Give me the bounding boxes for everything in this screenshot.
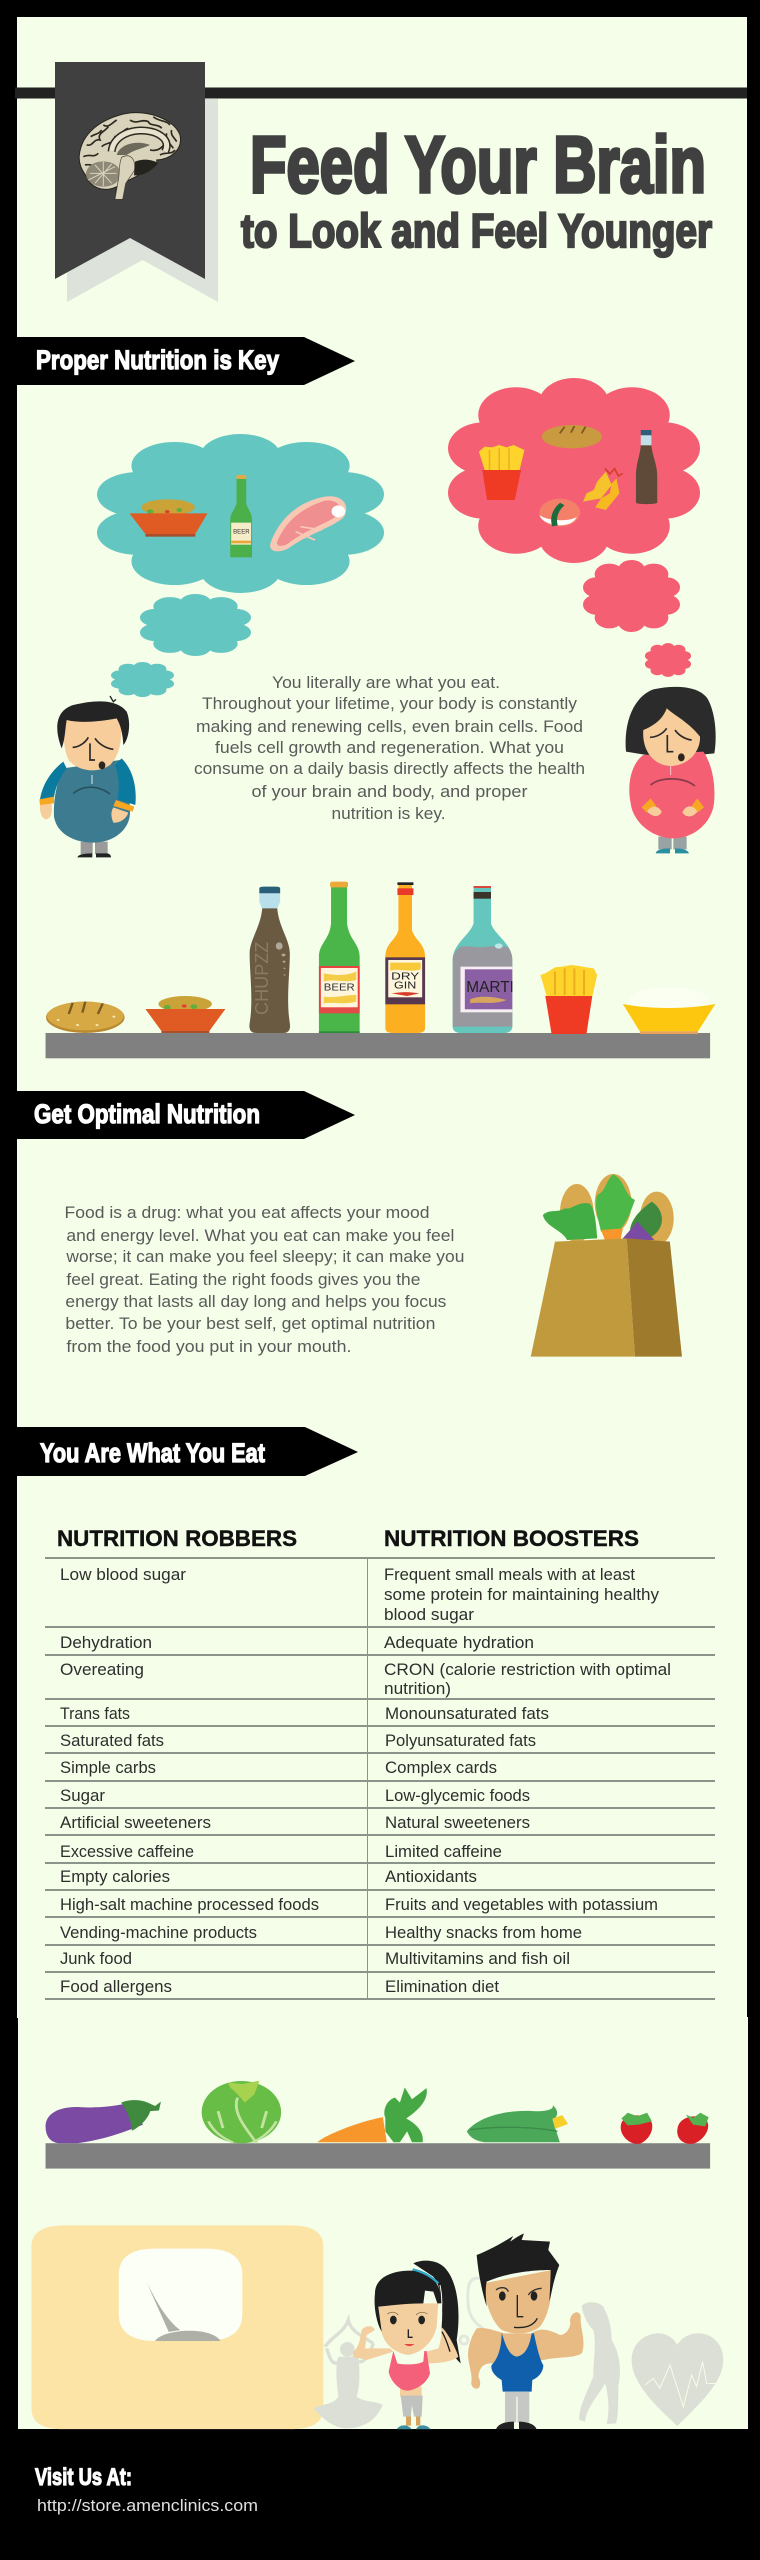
icon: gin bottle: DRY <box>391 971 420 982</box>
shelf with vegetables <box>46 2081 710 2169</box>
column: robbers: High-salt machine processed foods <box>60 1895 319 1914</box>
icon: beer bottle: BEER <box>233 527 250 535</box>
section banner: proper nutrition <box>17 337 355 385</box>
paragraph: food is a drug: feel great. Eating the right foods gives you the <box>66 1270 420 1289</box>
column: boosters: Antioxidants <box>385 1867 477 1886</box>
thought cloud: teal small <box>111 662 174 697</box>
character: fit man <box>468 2233 584 2429</box>
column: robbers: Sugar <box>60 1786 105 1805</box>
silhouette: heart with pulse <box>632 2333 732 2426</box>
title <box>241 120 712 257</box>
paragraph: food is a drug: from the food you put in your mouth. <box>66 1337 351 1356</box>
column: robbers: Empty calories <box>60 1867 170 1886</box>
icon: steak <box>270 496 346 551</box>
icon: fries <box>479 445 524 500</box>
icon: shrimp <box>583 468 623 510</box>
footer: visit us: Visit Us At: <box>35 2464 132 2491</box>
column: boosters: Frequent small meals with at least <box>384 1565 635 1584</box>
icon: salad bowl <box>145 996 225 1033</box>
column: boosters: Natural sweeteners <box>385 1813 530 1832</box>
column: robbers: Excessive caffeine <box>60 1842 194 1861</box>
column: robbers: Vending-machine products <box>60 1923 257 1942</box>
column: boosters: blood sugar <box>384 1605 474 1624</box>
column: boosters: Multivitamins and fish oil <box>385 1949 570 1968</box>
paragraph: you are what you eat: making and renewing cells, even brain cells. Food <box>196 717 583 736</box>
icon: beer bottle <box>230 475 252 557</box>
column: boosters: Monounsaturated fats <box>385 1704 549 1723</box>
section banner: optimal nutrition: Get Optimal Nutrition <box>34 1099 260 1129</box>
icon: beer bottle: BEER <box>324 982 355 993</box>
icon: carrot <box>317 2087 427 2142</box>
column: boosters: Polyunsaturated fats <box>385 1731 536 1750</box>
icon: martini bottle: MARTINI <box>466 979 529 996</box>
column: boosters: Low-glycemic foods <box>385 1786 530 1805</box>
column: robbers: Food allergens <box>60 1977 172 1996</box>
fitness figures <box>314 2233 732 2429</box>
character: unhappy woman <box>626 687 716 853</box>
ribbon shadow <box>67 99 218 302</box>
footer: visit us <box>35 2464 258 2515</box>
paragraph: you are what you eat <box>194 673 585 823</box>
icon: grocery bag <box>531 1174 682 1357</box>
thought cloud: pink medium <box>583 560 680 632</box>
icon: cola bottle <box>249 887 290 1033</box>
section banner: proper nutrition: Proper Nutrition is Key <box>36 345 279 375</box>
header bar <box>15 88 747 98</box>
icon: green vegetable <box>467 2105 568 2142</box>
column headers <box>57 1526 639 1551</box>
paragraph: you are what you eat: You literally are what you eat. <box>272 673 500 692</box>
column: robbers: Overeating <box>60 1660 144 1679</box>
footer: visit us: http://store.amenclinics.com <box>37 2497 258 2515</box>
icons in pink cloud <box>479 425 657 527</box>
icon: cola bottle <box>636 430 657 504</box>
paragraph: you are what you eat: consume on a daily basis directly affects the health <box>194 759 585 778</box>
paragraph: you are what you eat: Throughout your lifetime, your body is constantly <box>202 694 578 713</box>
icon: strawberry <box>621 2113 652 2144</box>
column: robbers <box>60 1565 319 1996</box>
column: boosters: CRON (calorie restriction with optimal <box>384 1660 671 1679</box>
thought cloud: teal medium <box>140 594 251 656</box>
column: robbers: Simple carbs <box>60 1758 156 1777</box>
icon: salad bowl <box>129 499 207 537</box>
section banner: optimal nutrition <box>17 1091 355 1139</box>
paragraph: you are what you eat: nutrition is key. <box>332 804 446 823</box>
icon: gin bottle: GIN <box>394 980 416 991</box>
ribbon <box>55 62 205 279</box>
column: boosters: Fruits and vegetables with potassium <box>385 1895 658 1914</box>
thought cloud: pink large <box>448 378 700 563</box>
column: robbers: Saturated fats <box>60 1731 164 1750</box>
thought cloud: pink small <box>645 643 691 677</box>
icon: martini bottle <box>452 886 512 1033</box>
shelf with junk food and drinks <box>46 882 715 1058</box>
character: fit woman <box>353 2261 461 2429</box>
column: robbers: Dehydration <box>60 1633 152 1652</box>
icon: brain <box>79 113 181 199</box>
column headers: NUTRITION BOOSTERS <box>384 1526 639 1551</box>
icon: strawberry <box>677 2113 709 2144</box>
column: boosters: Adequate hydration <box>384 1633 534 1652</box>
silhouette: yoga <box>314 2320 383 2428</box>
column: robbers: Junk food <box>60 1949 132 1968</box>
column: boosters: nutrition) <box>384 1679 451 1698</box>
column: boosters: Elimination diet <box>385 1977 499 1996</box>
table: nutrition robbers and boosters <box>45 1526 715 1999</box>
paragraph: food is a drug: and energy level. What you eat can make you feel <box>66 1226 454 1245</box>
paragraph: you are what you eat: of your brain and body, and proper <box>252 782 528 801</box>
column headers: NUTRITION ROBBERS <box>57 1526 297 1551</box>
column: robbers: Low blood sugar <box>60 1565 186 1584</box>
icon: cabbage <box>202 2081 281 2143</box>
icon: gin bottle <box>385 882 425 1033</box>
character: unhappy man <box>39 696 136 857</box>
icon: sushi <box>539 499 580 527</box>
paragraph: food is a drug: energy that lasts all day long and helps you focus <box>65 1292 446 1311</box>
shelf <box>46 1033 710 1058</box>
column: boosters: some protein for maintaining healthy <box>384 1585 659 1604</box>
section banner: you are what you eat <box>17 1427 358 1476</box>
silhouette: golfer <box>579 2302 620 2424</box>
stethoscope outline <box>460 2278 483 2344</box>
column: boosters: Healthy snacks from home <box>385 1923 582 1942</box>
paragraph: food is a drug <box>64 1203 464 1356</box>
thought cloud: teal large <box>97 434 384 593</box>
column: boosters: Limited caffeine <box>385 1842 502 1861</box>
section banner: you are what you eat: You Are What You Eat <box>40 1438 265 1468</box>
icon: beer bottle <box>319 882 360 1033</box>
icon: fries <box>540 965 597 1034</box>
paragraph: you are what you eat: fuels cell growth and regeneration. What you <box>215 738 564 757</box>
weighing scale <box>32 2225 323 2429</box>
column: robbers: Trans fats <box>60 1704 130 1723</box>
icon: bread <box>542 425 602 448</box>
icon: cola bottle: CHUPZZ <box>253 941 273 1015</box>
icon: rice bowl <box>623 987 715 1034</box>
icons in teal cloud <box>129 475 346 557</box>
column: boosters: Complex cards <box>385 1758 497 1777</box>
paragraph: food is a drug: Food is a drug: what you eat affects your mood <box>64 1203 430 1222</box>
icon: eggplant <box>46 2100 161 2143</box>
column: robbers: Artificial sweeteners <box>60 1813 211 1832</box>
paragraph: food is a drug: better. To be your best self, get optimal nutrition <box>65 1314 435 1333</box>
icon: bread <box>46 1002 125 1033</box>
paragraph: food is a drug: worse; it can make you feel sleepy; it can make you <box>65 1247 464 1266</box>
column: boosters <box>384 1565 671 1996</box>
shelf <box>46 2143 710 2169</box>
